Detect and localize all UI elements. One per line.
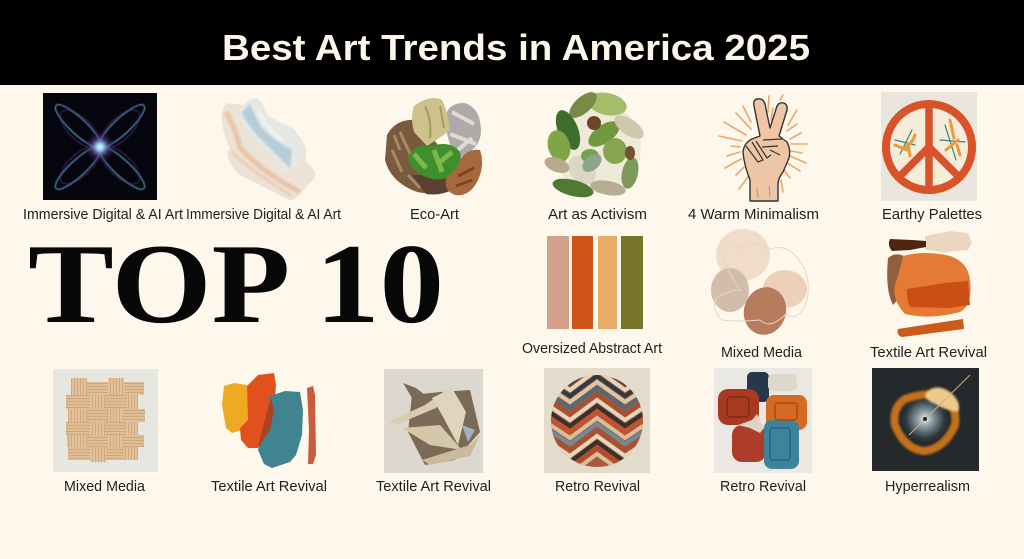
item: retro revival, chevrons: [544, 368, 650, 491]
label: Textile Art Revival: [870, 344, 987, 361]
icon: earth-tone paint strokes: [887, 231, 972, 337]
label: Mixed Media: [64, 478, 146, 495]
icon: colourful brush strokes: [222, 373, 316, 468]
label: Immersive Digital & AI Art: [23, 206, 184, 223]
icon: woven basket texture: [53, 369, 158, 472]
item: mixed media abstract: [711, 229, 808, 361]
label: Earthy Palettes: [882, 206, 982, 223]
label: Retro Revival: [720, 478, 806, 495]
icon: layered wavy form: [222, 98, 315, 200]
item: eco-art: [385, 98, 482, 223]
item: mixed media weave: [53, 369, 158, 495]
item: textile art revival, orange: [870, 231, 987, 361]
item: oversized abstract art: [522, 236, 663, 357]
item: warm minimalism: [688, 95, 819, 223]
title: Best Art Trends in America 2025: [222, 27, 810, 68]
icon: organic blobs: [711, 229, 808, 340]
label: Eco-Art: [410, 206, 460, 223]
label: 4 Warm Minimalism: [688, 206, 819, 223]
item: earthy palettes: [881, 92, 982, 223]
icon: natural material cluster: [385, 98, 482, 195]
icon: braided coasters: [714, 368, 812, 473]
label: Mixed Media: [721, 344, 803, 361]
icon: glowing orange ring: [872, 368, 979, 471]
header banner: [0, 0, 1024, 85]
item: art as activism: [542, 88, 648, 223]
label: Art as Activism: [548, 206, 647, 223]
icon: leaf collage: [542, 88, 648, 201]
item: retro revival, coasters: [714, 368, 812, 495]
item: textile art revival, crumpled: [376, 369, 491, 495]
icon: peace sign: [881, 92, 977, 201]
label: Textile Art Revival: [211, 478, 327, 495]
label: Retro Revival: [555, 478, 640, 495]
icon: peace hand with rays: [719, 95, 807, 201]
icon: colour stripes: [547, 236, 643, 329]
icon: chevron woven circle: [544, 368, 650, 473]
icon: glowing digital artwork: [43, 93, 157, 200]
label: Hyperrealism: [885, 478, 970, 495]
item: digital art 1: [23, 93, 184, 223]
label: Oversized Abstract Art: [522, 340, 663, 357]
item: hyperrealism: [872, 368, 979, 495]
label: Immersive Digital & AI Art: [186, 206, 342, 223]
item: digital art 2: [186, 98, 342, 223]
label: Textile Art Revival: [376, 478, 491, 495]
heading: TOP 10: TOP 10: [28, 220, 444, 347]
item: textile art revival, paint: [211, 373, 327, 495]
icon: crumpled fabric: [384, 369, 483, 473]
